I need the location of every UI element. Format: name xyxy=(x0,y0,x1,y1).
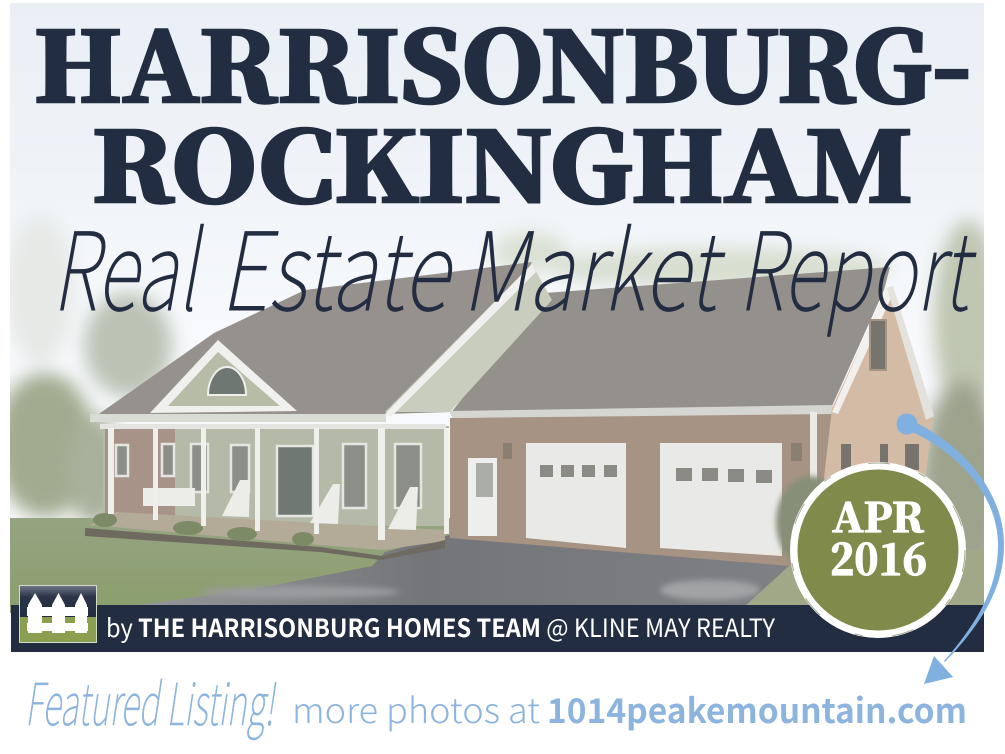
side windows xyxy=(841,444,919,470)
trees on the right xyxy=(488,212,984,550)
date badge xyxy=(790,462,966,638)
carriage lamps xyxy=(503,443,802,461)
arrow: curved pointer to web address xyxy=(896,414,1004,684)
title: HARRISONBURG-ROCKINGHAM: ROCKINGHAM xyxy=(92,94,913,230)
right roof xyxy=(450,267,890,414)
date badge: APR xyxy=(832,487,924,544)
porch furniture xyxy=(143,480,418,530)
porch beam xyxy=(90,414,386,422)
logo icon: white picket fence xyxy=(19,585,97,643)
right grass xyxy=(746,550,984,605)
side gable brick wall xyxy=(824,289,933,481)
callout: featured listing: Featured Listing! xyxy=(25,658,276,742)
porch floor and bed xyxy=(90,512,445,550)
porch wall xyxy=(103,426,449,526)
byline text: by THE HARRISONBURG HOMES TEAM @ KLINE MAY REALTY xyxy=(106,609,776,645)
subtitle: Real Estate Market Report xyxy=(52,186,977,342)
garage door windows xyxy=(540,465,772,483)
footer bar xyxy=(11,605,984,652)
shrubs xyxy=(93,513,314,546)
porch windows and front door xyxy=(116,444,421,516)
gable arch window xyxy=(208,367,246,395)
subtitle: Real Estate Market Report: Estate xyxy=(220,186,454,342)
garage door two xyxy=(660,443,782,556)
main left roof xyxy=(96,262,532,416)
callout: featured listing: 1014peakemountain.com xyxy=(547,684,967,733)
subtitle: Real Estate Market Report: Market xyxy=(462,186,725,342)
callout: featured listing xyxy=(25,658,967,742)
side door xyxy=(468,458,497,536)
porch columns xyxy=(108,428,449,540)
garage wall xyxy=(450,412,832,566)
garage gutter xyxy=(450,405,834,418)
callout: featured listing: more photos at xyxy=(292,683,540,734)
date badge: 2016 xyxy=(830,524,927,588)
front gable xyxy=(150,340,297,413)
lawn xyxy=(10,518,450,613)
driveway xyxy=(130,535,790,606)
title: HARRISONBURG-ROCKINGHAM xyxy=(34,0,971,230)
gable window xyxy=(870,320,886,370)
trees on the left xyxy=(0,215,172,525)
subtitle: Real Estate Market Report: Real xyxy=(52,186,204,342)
garage door one xyxy=(526,443,626,548)
gable siding strip xyxy=(385,264,552,412)
shrub beside garage xyxy=(772,472,827,562)
